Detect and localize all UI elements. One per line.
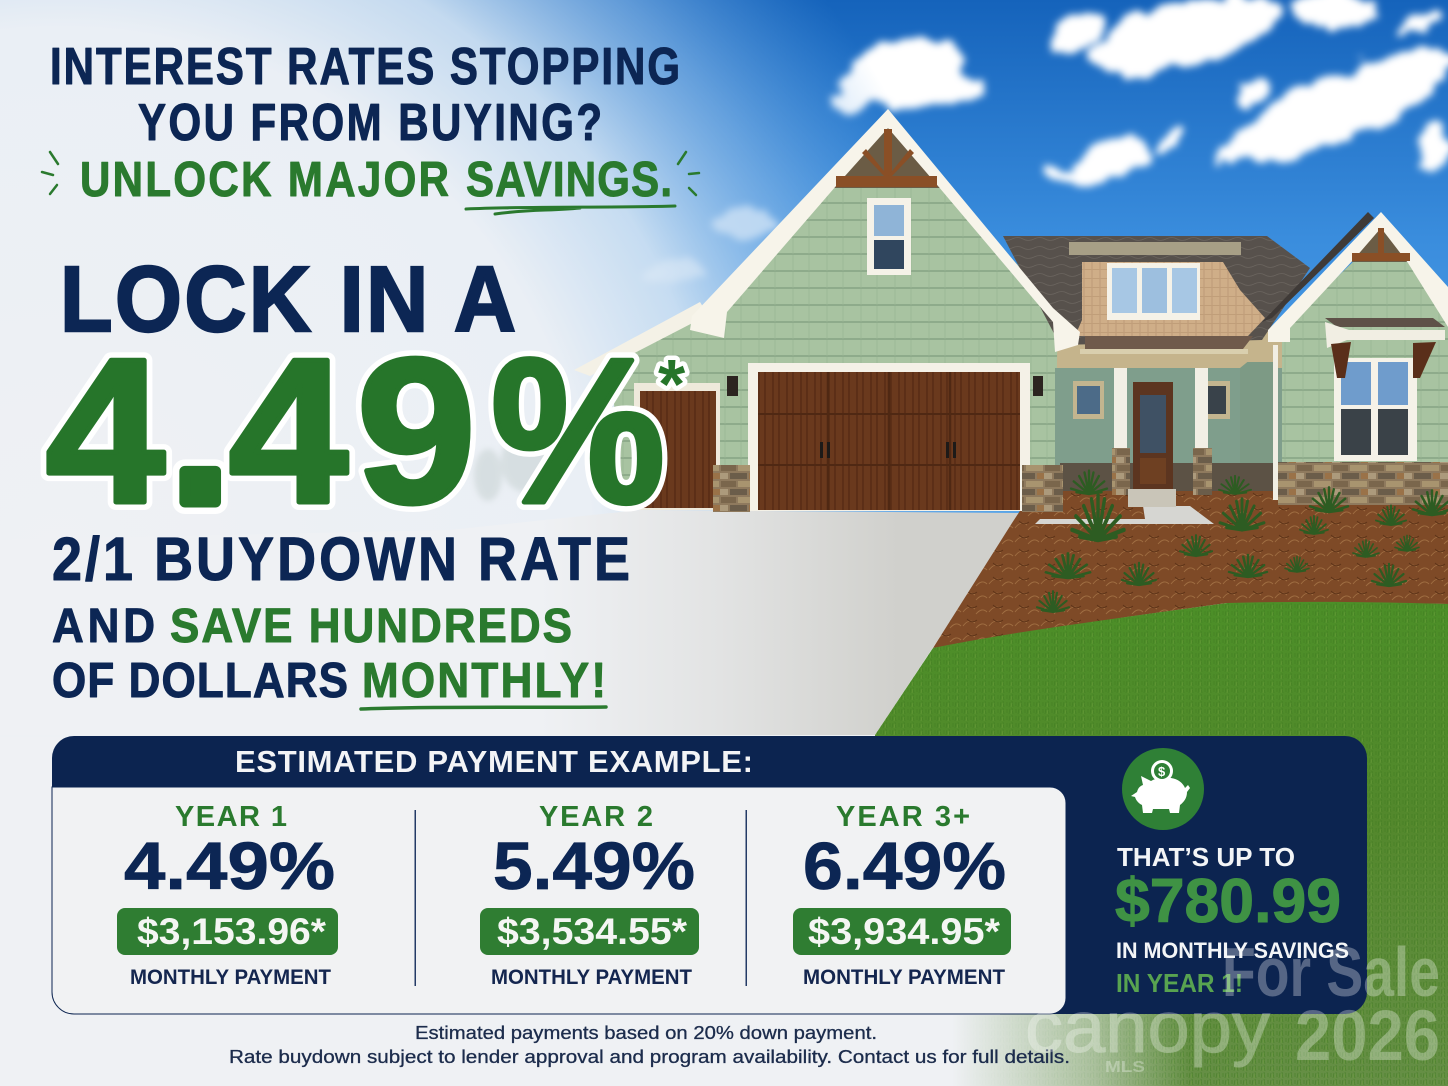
asterisk: * <box>658 345 686 423</box>
year 2 pill <box>480 908 699 955</box>
right column <box>1193 368 1212 495</box>
divider 2 <box>746 810 747 986</box>
big rate decimal fill: . <box>171 316 230 546</box>
driveway <box>0 510 1022 735</box>
main house <box>690 109 1310 512</box>
column: year 1 <box>117 801 338 989</box>
panel: estimated payment <box>52 736 1367 1014</box>
year 1 amount: $3,153.96* <box>137 911 327 952</box>
year 1 rate: 4.49% <box>124 829 335 904</box>
big rate 4.49% <box>46 315 686 546</box>
watermark canopy: canopy <box>1025 988 1270 1068</box>
lock in a: LOCK IN A <box>60 247 516 351</box>
big rate digits fill: 4.49 <box>46 316 476 546</box>
porch step <box>1128 489 1176 507</box>
footnote line 1: Estimated payments based on 20% down payment. <box>415 1023 877 1043</box>
year 3 label: YEAR 3+ <box>836 801 970 833</box>
line 2: YOU FROM BUYING? <box>138 94 602 152</box>
awning <box>1325 318 1445 378</box>
white card <box>52 787 1066 1014</box>
icon: piggy bank: $ <box>1158 764 1166 779</box>
small garage door <box>640 391 716 508</box>
savings: SAVINGS. <box>466 151 672 207</box>
dormer fascia <box>1069 242 1241 255</box>
right porch side siding <box>1240 362 1278 467</box>
left wing wall <box>610 312 722 510</box>
burst left <box>42 152 58 194</box>
panel title: ESTIMATED PAYMENT EXAMPLE: <box>235 744 753 779</box>
main gable trim <box>690 109 1080 352</box>
headline <box>42 38 699 214</box>
porch right window <box>1207 381 1230 419</box>
walkway <box>1035 506 1214 524</box>
gable shadow interior <box>832 128 944 188</box>
small garage frame <box>634 383 720 510</box>
big rate percent outline: % <box>491 315 665 546</box>
gable brace <box>836 129 937 187</box>
year 3 pill <box>793 908 1011 955</box>
savings year: IN YEAR 1! <box>1116 968 1243 998</box>
divider 1 <box>414 810 416 986</box>
right gable shadow interior <box>1350 226 1412 262</box>
shrubs <box>1037 471 1448 612</box>
main gable wall <box>722 120 1058 465</box>
savings lead-in: THAT’S UP TO <box>1117 842 1295 872</box>
downspout <box>1273 345 1278 500</box>
left wing of house with small garage <box>574 302 722 510</box>
left lamp <box>727 376 738 396</box>
big rate digits outline: 4.49 <box>46 316 476 546</box>
year 2 rate: 5.49% <box>493 829 695 904</box>
year 2 label: YEAR 2 <box>539 801 653 833</box>
2/1 buydown rate: 2/1 BUYDOWN RATE <box>52 526 630 594</box>
year 2 caption: MONTHLY PAYMENT <box>491 965 692 989</box>
footnote <box>229 1023 1070 1067</box>
panel background <box>52 736 1367 1014</box>
gray roof <box>1003 236 1310 345</box>
right stone base <box>1278 462 1448 505</box>
right gable wing <box>1262 212 1448 505</box>
porch ceiling <box>1058 355 1256 368</box>
year 1 pill <box>117 908 338 955</box>
porch wall <box>1055 368 1285 468</box>
faded trees <box>474 432 549 501</box>
line 3 <box>80 151 672 207</box>
front door <box>1133 382 1173 489</box>
stone left of garage <box>713 465 750 512</box>
lawn <box>875 602 1448 1086</box>
right lamp <box>1033 376 1043 396</box>
footnote line 2: Rate buydown subject to lender approval and program availability. Contact us for full details. <box>229 1047 1070 1067</box>
column: year 3 <box>793 801 1011 989</box>
bottom strip <box>0 1012 1190 1086</box>
line 1: INTEREST RATES STOPPING <box>50 38 680 96</box>
dormer window <box>1107 263 1200 320</box>
right gable wall <box>1282 235 1448 465</box>
big rate decimal outline: . <box>171 316 230 546</box>
icon: piggy bank <box>1122 748 1204 830</box>
unlock major: UNLOCK MAJOR <box>80 151 449 207</box>
dormer cheek <box>1075 262 1265 336</box>
year 2 amount: $3,534.55* <box>497 911 688 952</box>
garage door <box>758 372 1020 510</box>
year 3 caption: MONTHLY PAYMENT <box>803 965 1005 989</box>
porch left window <box>1073 381 1104 419</box>
sky background <box>0 0 1448 530</box>
savings underline <box>466 206 675 214</box>
burst right <box>678 152 699 195</box>
right gable brace <box>1352 228 1410 261</box>
watermark mls: MLS <box>1105 1059 1145 1076</box>
big rate percent fill: % <box>491 315 665 546</box>
right gable trim <box>1268 212 1448 342</box>
left of panel cover <box>0 737 1000 1015</box>
stone right of garage <box>1022 465 1063 512</box>
save hundreds: SAVE HUNDREDS <box>170 598 572 652</box>
right window <box>1334 358 1417 461</box>
save hundreds line <box>52 598 572 652</box>
left column <box>1112 368 1130 495</box>
porch fascia <box>1080 349 1248 354</box>
watermark <box>1025 933 1440 1076</box>
monthly: MONTHLY! <box>362 653 606 708</box>
porch back fill <box>1055 330 1287 370</box>
year 3 amount: $3,934.95* <box>808 911 1001 952</box>
garage door frame <box>748 363 1030 511</box>
year 1 caption: MONTHLY PAYMENT <box>130 965 331 989</box>
upper gable window <box>867 198 911 275</box>
year 1 label: YEAR 1 <box>175 801 287 833</box>
savings amount: $780.99 <box>1115 867 1341 936</box>
left wing roof trim <box>574 302 708 376</box>
of dollars: OF DOLLARS <box>52 653 348 708</box>
column: year 2 <box>480 801 699 989</box>
savings caption: IN MONTHLY SAVINGS <box>1116 938 1349 963</box>
copper porch roof <box>1085 336 1253 349</box>
sky fade to white on left <box>0 0 1020 540</box>
clouds <box>645 0 1448 283</box>
right roof edge <box>1262 212 1374 322</box>
dark stone skirt <box>1060 463 1278 491</box>
year 3 rate: 6.49% <box>803 829 1006 904</box>
and: AND <box>52 598 155 652</box>
mulch bed <box>933 488 1448 648</box>
monthly underline <box>361 707 606 709</box>
dollars monthly line <box>52 653 606 709</box>
